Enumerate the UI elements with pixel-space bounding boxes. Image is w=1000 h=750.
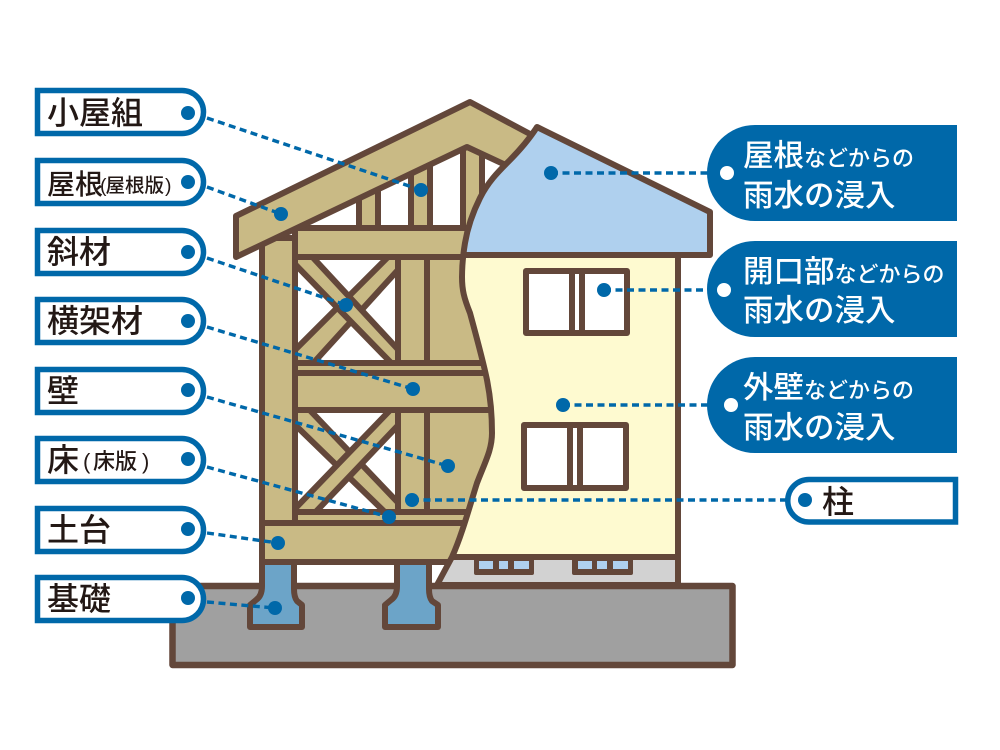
label: 床(床版): 床版 xyxy=(93,449,137,474)
label: 床(床版): 床 xyxy=(47,442,79,478)
callout: 外壁などからの雨水の浸入 xyxy=(707,357,957,453)
house timber frame xyxy=(236,102,560,627)
leader dots xyxy=(268,166,611,615)
leader lines xyxy=(207,118,786,608)
label: 基礎 xyxy=(38,578,204,620)
label: 屋根(屋根版): 屋根版 xyxy=(106,175,165,197)
corner post xyxy=(262,238,295,523)
eaves and wall base lines xyxy=(452,255,710,557)
callout: 開口部などからの雨水の浸入 xyxy=(707,241,957,337)
label: 屋根(屋根版): ( xyxy=(100,175,106,197)
right vent xyxy=(572,557,633,575)
label: 斜材: 斜材 xyxy=(47,234,111,270)
label: 壁 xyxy=(38,370,204,412)
callout: 屋根などからの雨水の浸入 xyxy=(707,125,957,221)
callout: 屋根などからの雨水の浸入: 雨水の浸入 xyxy=(743,179,896,213)
label: 屋根(屋根版): ) xyxy=(165,175,172,197)
label: 小屋組 xyxy=(38,90,204,134)
lower window xyxy=(524,425,626,488)
callout: 外壁などからの雨水の浸入: 雨水の浸入 xyxy=(743,411,896,445)
foundations xyxy=(250,560,438,627)
label: 土台: 土台 xyxy=(47,512,111,548)
label: 壁: 壁 xyxy=(47,373,79,409)
house exterior xyxy=(437,127,710,585)
left vent xyxy=(474,557,534,575)
exterior roof xyxy=(466,131,707,252)
callout: 外壁などからの雨水の浸入: 外壁などからの xyxy=(743,371,914,405)
second floor diagonal braces xyxy=(287,403,406,520)
label: 横架材 xyxy=(38,300,204,342)
wall studs xyxy=(398,257,500,512)
label: 床(床版) xyxy=(38,438,204,482)
exterior wall xyxy=(437,127,710,585)
label: 屋根(屋根版) xyxy=(38,160,204,204)
label: 床(床版): ) xyxy=(142,449,149,474)
label: 小屋組: 小屋組 xyxy=(47,95,143,131)
ground xyxy=(172,586,732,665)
label: 土台 xyxy=(38,508,204,552)
house outline xyxy=(437,127,710,585)
upper window xyxy=(526,271,627,333)
callout: 開口部などからの雨水の浸入: 雨水の浸入 xyxy=(743,294,896,328)
first floor diagonal braces xyxy=(288,249,407,372)
label: 床(床版): ( xyxy=(83,449,90,474)
roof board xyxy=(236,102,560,257)
horizontal beams xyxy=(295,228,500,523)
sill xyxy=(262,523,500,562)
roof truss studs xyxy=(359,140,522,230)
label: 柱: 柱 xyxy=(822,484,854,520)
label: 横架材: 横架材 xyxy=(47,303,143,339)
crawl space strip xyxy=(442,560,675,582)
label: 基礎: 基礎 xyxy=(47,581,111,617)
label: 斜材 xyxy=(38,230,204,274)
callout: 開口部などからの雨水の浸入: 開口部などからの xyxy=(743,255,945,289)
callout: 屋根などからの雨水の浸入: 屋根などからの xyxy=(743,139,914,173)
label: 屋根(屋根版): 屋根 xyxy=(47,169,103,200)
label: 柱 xyxy=(788,480,956,522)
